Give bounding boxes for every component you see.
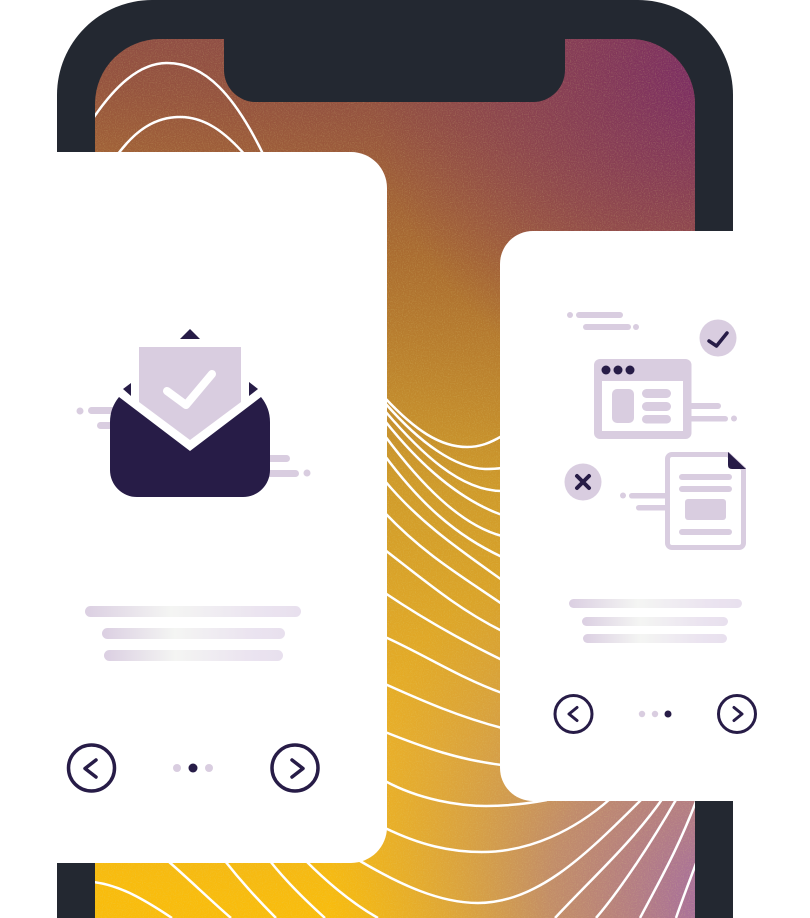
text placeholder bars xyxy=(85,606,301,661)
panel: right card xyxy=(500,231,756,801)
decorative speed lines top xyxy=(567,312,639,330)
phone screen with gradient and wave lines xyxy=(90,39,698,918)
phone notch xyxy=(224,30,565,102)
pagination dots xyxy=(639,710,672,718)
pagination dots xyxy=(173,764,213,772)
icon: document xyxy=(620,452,746,548)
icon: cross badge xyxy=(564,464,602,500)
icon: previous arrow xyxy=(555,696,592,732)
icon: next arrow xyxy=(272,745,318,791)
icon: next arrow xyxy=(718,696,756,732)
text placeholder bars xyxy=(569,599,742,643)
icon: browser window xyxy=(594,359,737,439)
icon: check badge xyxy=(700,320,736,356)
panel: left card xyxy=(0,152,387,863)
icon: open envelope with check xyxy=(76,329,310,497)
icon: previous arrow xyxy=(68,745,114,791)
